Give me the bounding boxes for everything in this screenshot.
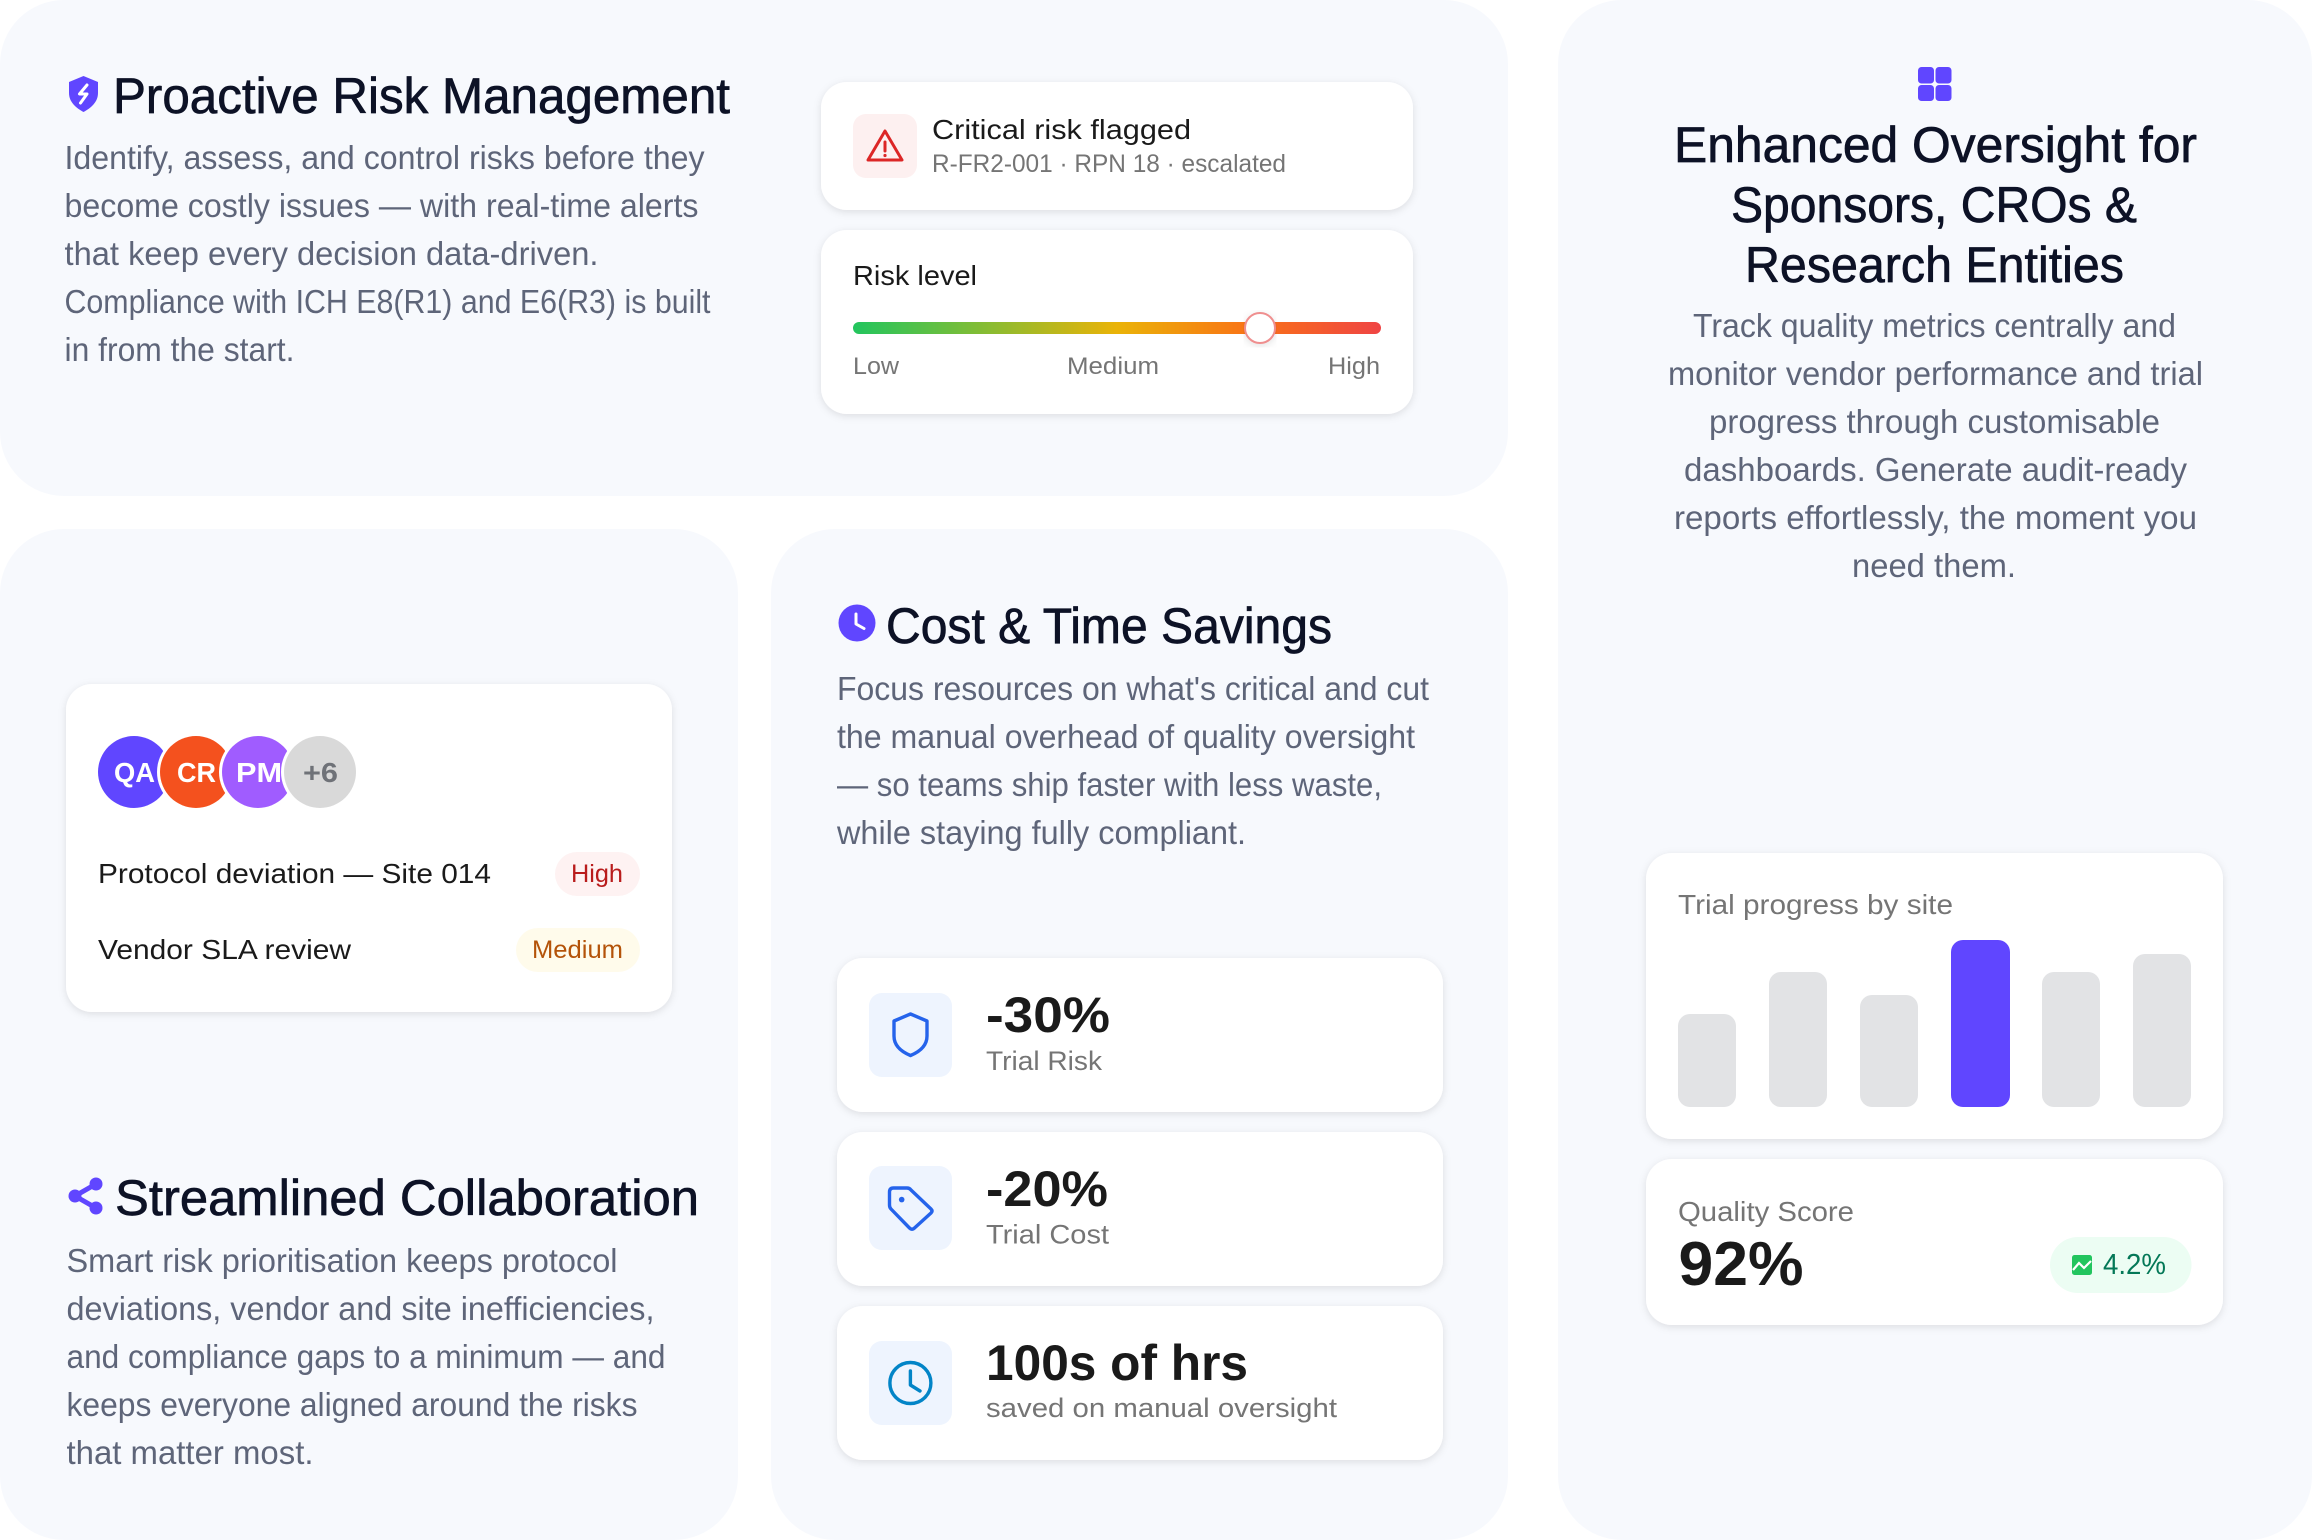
body text: — so teams ship faster with less waste, (837, 766, 1382, 803)
caption: saved on manual oversight (986, 1393, 1338, 1423)
body text: Identify, assess, and control risks before they (64, 139, 705, 176)
issue row: protocol deviation (98, 852, 640, 896)
icon: price tag (869, 1166, 952, 1250)
body text: monitor vendor performance and trial (1668, 355, 2203, 392)
issue row: vendor SLA review: Vendor SLA review (98, 934, 352, 965)
icon: shield with bolt (69, 76, 98, 112)
panel: streamlined collaboration (0, 529, 738, 1540)
body text: Compliance with ICH E8(R1) and E6(R3) is built (64, 283, 710, 320)
body text: the manual overhead of quality oversight (837, 718, 1415, 755)
alert title: Critical risk flagged (932, 114, 1191, 145)
caption: Trial Cost (986, 1220, 1110, 1250)
avatars: PM (236, 757, 282, 788)
stat card: trial risk (837, 958, 1443, 1112)
body text: progress through customisable (1709, 403, 2160, 440)
avatars: CR (177, 757, 216, 788)
slider track (853, 322, 1381, 334)
avatars: QA (114, 757, 155, 788)
trend pill (2050, 1237, 2192, 1293)
body text: in from the start. (64, 331, 294, 368)
avatars: +6 (303, 757, 338, 788)
body text: become costly issues — with real-time alerts (64, 187, 698, 224)
heading: Streamlined Collaboration (115, 1170, 699, 1226)
icon: share (68, 1178, 102, 1214)
value: -30% (986, 987, 1110, 1043)
body text (66, 1242, 666, 1471)
heading: Cost & Time Savings (886, 598, 1332, 654)
body text: keeps everyone aligned around the risks (66, 1386, 638, 1423)
card: team and issues (66, 684, 672, 1012)
body text (1668, 307, 2203, 584)
icon: dashboard grid (1918, 67, 1952, 101)
label: Risk level (853, 260, 977, 291)
value: -20% (986, 1161, 1108, 1217)
issue row: vendor SLA review (98, 928, 640, 972)
avatars (98, 733, 359, 811)
scale labels: High (1328, 353, 1380, 380)
issue row: protocol deviation: Protocol deviation — Site 014 (98, 858, 491, 889)
icon: clock (869, 1341, 952, 1425)
body text (64, 139, 710, 368)
body text: while staying fully compliant. (836, 814, 1246, 851)
icon: clock badge (838, 604, 876, 642)
panel: enhanced oversight (1558, 0, 2312, 1540)
icon: shield (869, 993, 952, 1077)
body text: dashboards. Generate audit-ready (1684, 451, 2187, 488)
scale labels: Low (853, 353, 900, 380)
panel: proactive risk management (0, 0, 1508, 496)
body text (836, 670, 1429, 851)
value: 100s of hrs (986, 1335, 1248, 1391)
body text: reports effortlessly, the moment you (1674, 499, 2197, 536)
score value: 92% (1678, 1230, 1804, 1299)
heading: Proactive Risk Management (113, 68, 730, 124)
body text: Track quality metrics centrally and (1693, 307, 2176, 344)
chart title: Trial progress by site (1678, 889, 1953, 920)
card: critical risk flagged (821, 82, 1413, 210)
stat card: hours saved (837, 1306, 1443, 1460)
heading: Research Entities (1745, 237, 2124, 293)
heading: Enhanced Oversight for (1674, 117, 2197, 173)
body text: Smart risk prioritisation keeps protocol (66, 1242, 618, 1279)
panel: cost and time savings (771, 529, 1508, 1540)
body text: need them. (1852, 547, 2016, 584)
body text: that keep every decision data-driven. (64, 235, 598, 272)
slider thumb (1245, 313, 1275, 343)
body text: that matter most. (66, 1434, 314, 1471)
issue row: vendor SLA review: Medium (532, 936, 623, 964)
card: risk level slider (821, 230, 1413, 414)
stat card: trial cost (837, 1132, 1443, 1286)
scale labels: Medium (1067, 353, 1159, 380)
body text: and compliance gaps to a minimum — and (66, 1338, 666, 1375)
heading: Sponsors, CROs & (1731, 177, 2137, 233)
label: Quality Score (1678, 1196, 1854, 1227)
card: trial progress bar chart (1646, 853, 2223, 1139)
alert detail: R-FR2-001 · RPN 18 · escalated (932, 150, 1286, 178)
heading (1674, 117, 2197, 293)
caption: Trial Risk (986, 1046, 1103, 1076)
bar chart (1678, 940, 2191, 1107)
issue row: protocol deviation: High (571, 860, 623, 888)
card: quality score (1646, 1159, 2223, 1325)
icon: warning triangle (853, 114, 917, 178)
scale labels (853, 353, 1380, 380)
trend pill: 4.2% (2103, 1249, 2166, 1281)
body text: Focus resources on what's critical and cut (837, 670, 1429, 707)
body text: deviations, vendor and site inefficiencies, (66, 1290, 654, 1327)
